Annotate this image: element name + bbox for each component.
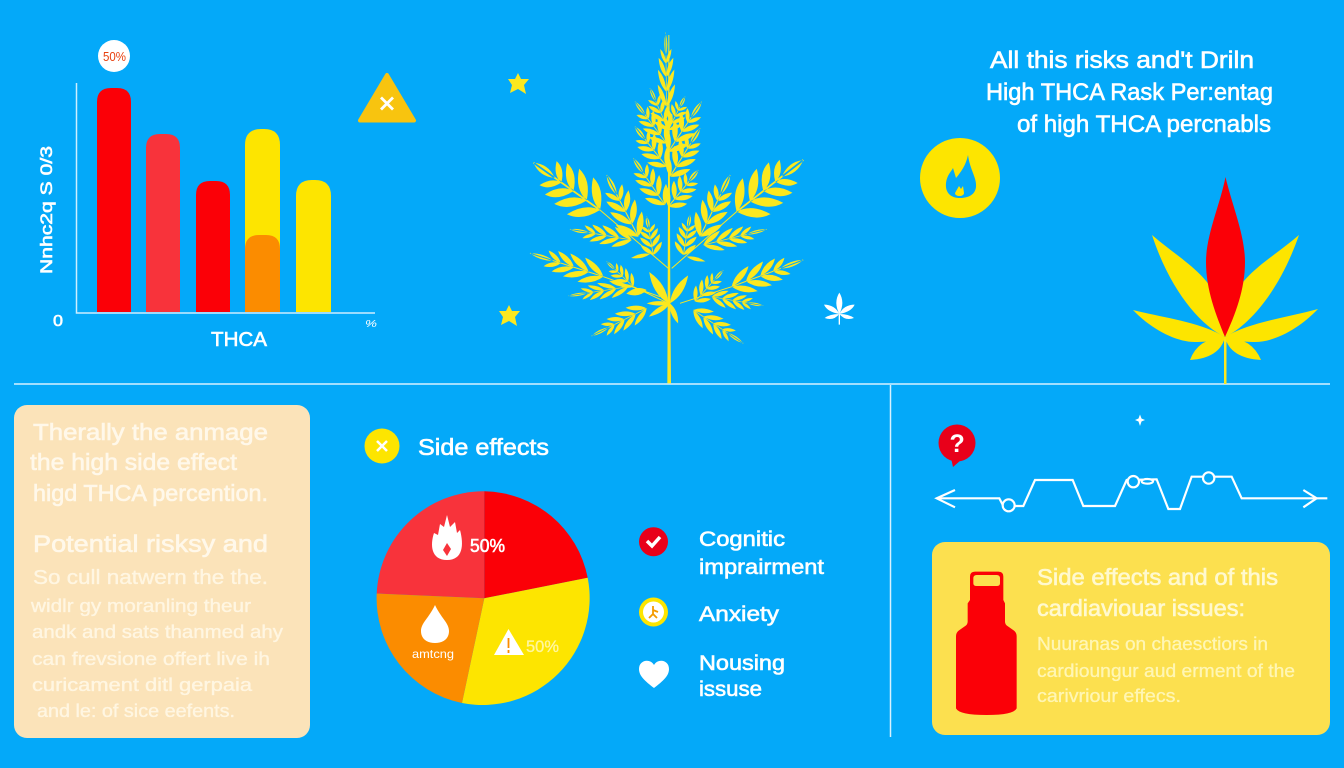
legend label: housing: Nousing <box>699 652 785 675</box>
panel: cardiovascular issues <box>932 542 1330 735</box>
icon: red bottle <box>956 572 1017 715</box>
panel: THCA bar chart <box>37 40 377 351</box>
icon: flame in yellow circle <box>920 138 1000 218</box>
arrow timeline <box>937 472 1327 511</box>
timeline path <box>937 477 1327 509</box>
icon: drop <box>421 605 449 643</box>
intro paragraph: the high side effect <box>30 449 238 475</box>
panel heading <box>1037 564 1278 621</box>
icon: warning triangle <box>494 629 524 655</box>
x axis unit: % <box>365 319 377 330</box>
legend label: cognitive: imprairment <box>699 556 824 579</box>
bar 4 orange segment <box>245 235 280 312</box>
main stem <box>667 35 671 383</box>
right arrowhead <box>1303 490 1317 507</box>
panel body text: Nuuranas on chaesctiors in <box>1037 634 1268 654</box>
zero label: 0 <box>53 313 63 330</box>
bar 3 <box>196 181 230 312</box>
heading: high THCA risk: All this risks and't Driln <box>990 47 1254 74</box>
panel: potential risks text <box>14 405 310 738</box>
risks paragraph <box>30 567 283 721</box>
divider lines <box>14 384 1330 737</box>
bar 5 <box>296 180 331 312</box>
icon: heart <box>639 661 669 688</box>
risks paragraph: andk and sats thanmed ahy <box>32 622 283 642</box>
x axis label: THCA <box>211 329 268 351</box>
icon: yellow star bottom <box>499 305 520 326</box>
side effects heading: Side effects <box>418 434 549 460</box>
icon: red check <box>639 527 668 556</box>
legend label: housing <box>699 652 785 701</box>
risks paragraph: and le: of sice eefents. <box>37 701 235 721</box>
panel body text: carivriour effecs. <box>1037 686 1181 706</box>
icon: warning triangle <box>360 75 414 120</box>
icon: flame <box>432 515 462 560</box>
risks paragraph: can frevsione offert live ih <box>32 649 270 669</box>
illustration: red and yellow leaf <box>1133 177 1318 384</box>
heading: high THCA risk: of high THCA percnabls <box>1017 111 1271 138</box>
icon: small white star <box>1135 414 1145 426</box>
illustration: large yellow cannabis plant <box>520 33 855 383</box>
bar 1 <box>97 88 131 312</box>
heading: high THCA risk <box>986 47 1273 138</box>
risks paragraph: curicament ditl gerpaia <box>32 675 253 695</box>
intro paragraph: higd THCA percention. <box>33 480 268 506</box>
label: orange slice: amtcng <box>412 647 454 661</box>
pie chart <box>377 491 590 705</box>
bar 4 yellow <box>245 129 280 312</box>
panel heading: cardiaviouar issues: <box>1037 595 1245 621</box>
legend label: cognitive <box>699 528 824 579</box>
icon: small white leaf <box>824 293 855 325</box>
icon: yellow x circle <box>364 428 400 464</box>
section: side effects <box>364 428 824 705</box>
branch stems <box>600 210 737 303</box>
icon: anxiety <box>639 598 668 626</box>
bar 2 <box>146 134 180 312</box>
y axis label: Nnhc2q S 0/3 <box>37 146 56 274</box>
legend label: anxiety: Anxiety <box>699 603 780 626</box>
legend label: housing: issuse <box>699 678 762 701</box>
intro paragraph <box>30 419 268 506</box>
left arrowhead <box>937 490 955 507</box>
fronds <box>520 33 817 352</box>
panel heading: Side effects and of this <box>1037 564 1278 590</box>
icon: yellow star top <box>508 73 529 94</box>
chart axes <box>76 83 375 313</box>
panel body text <box>1037 634 1295 706</box>
icon: question bubble <box>938 424 976 467</box>
intro paragraph: Therally the anmage <box>33 419 268 445</box>
panel body text: cardioungur aud erment of the <box>1037 661 1295 681</box>
legend label: cognitive: Cognitic <box>699 528 785 551</box>
timeline markers <box>1003 472 1214 511</box>
heading: high THCA risk: High THCA Rask Per:entag <box>986 79 1273 106</box>
label: 50 percent yellow: 50% <box>526 637 559 656</box>
label: 50 percent red: 50% <box>470 536 505 556</box>
risks subheading: Potential risksy and <box>33 531 268 558</box>
badge: 50 percent: 50% <box>103 49 126 64</box>
risks paragraph: widlr gy moranling theur <box>30 596 251 616</box>
risks paragraph: So cull natwern the the. <box>33 567 268 589</box>
icon: question bubble: ? <box>950 430 965 458</box>
legend <box>639 527 824 701</box>
badge: 50 percent <box>98 40 130 72</box>
